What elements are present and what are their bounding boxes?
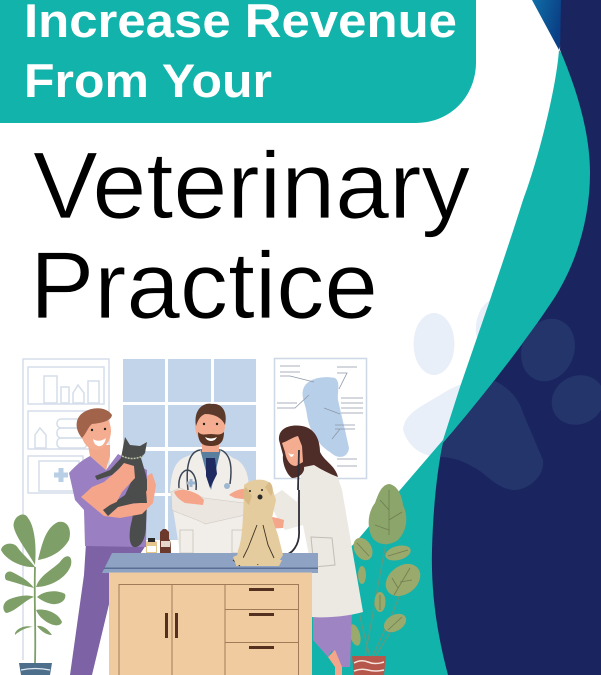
shelf unit <box>23 359 109 660</box>
medicine bottles <box>146 529 171 559</box>
heading line 2: From Your <box>24 54 272 107</box>
window <box>123 359 256 540</box>
paw toe 4 <box>552 376 601 424</box>
cabinet <box>109 572 312 675</box>
decorative wave: teal band <box>312 50 600 675</box>
plant pot: left <box>19 663 52 675</box>
illustration: clinic scene <box>1 358 427 675</box>
paw print watermark on white <box>403 295 543 490</box>
person: male vet with cat <box>69 408 156 675</box>
person: female vet <box>256 426 363 675</box>
exam table top <box>102 553 318 573</box>
decorative wave: navy panel <box>432 0 601 675</box>
plant pot: right <box>352 656 386 675</box>
plant: right <box>347 484 427 657</box>
heading: Veterinary Practice <box>30 133 471 339</box>
cat <box>95 437 149 547</box>
person: bearded vet <box>170 404 250 553</box>
anatomy poster <box>274 358 366 478</box>
paw print watermark on navy <box>440 319 601 490</box>
heading word: Veterinary: Veterinary <box>33 133 471 239</box>
paw toe 3 <box>521 319 575 381</box>
decorative wave: top blue wedge <box>532 0 561 50</box>
dog <box>233 480 283 566</box>
heading: Increase Revenue From Your <box>24 0 457 107</box>
title banner <box>0 0 476 123</box>
plant: left <box>1 514 71 663</box>
paw main pad <box>440 381 543 490</box>
heading word: Practice: Practice <box>30 233 378 339</box>
man's arms <box>81 463 156 518</box>
